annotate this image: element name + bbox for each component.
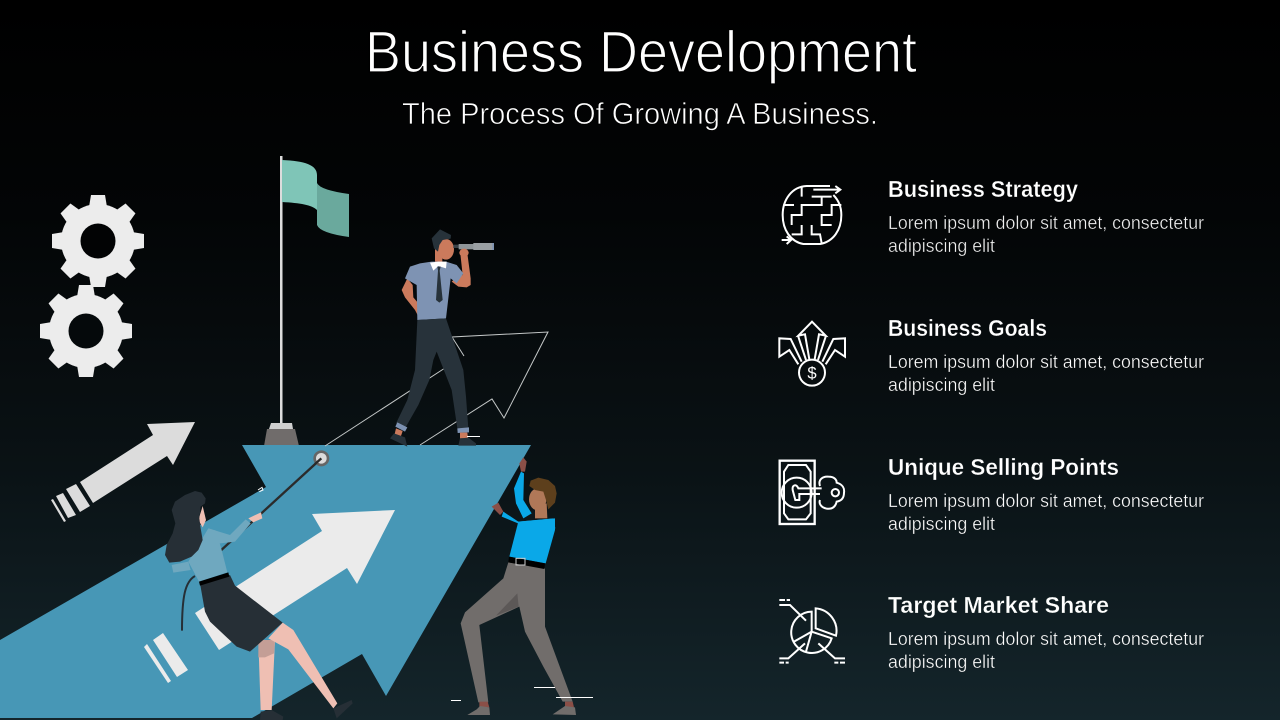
flag base [269,423,293,429]
icon: key and banknote [780,461,844,524]
shoes [467,706,576,715]
item: Target Market Share [888,592,1204,672]
item: Business Strategy [888,176,1204,256]
tie [436,267,443,303]
shirt [405,262,463,320]
trousers [461,562,573,702]
trousers [396,318,468,428]
heading: Target Market Share [888,592,1109,618]
small white mark [258,487,263,492]
body text: adipiscing elit [888,514,995,534]
flag cloth dark part [317,183,349,237]
body text: Lorem ipsum dolor sit amet, consectetur [888,352,1204,372]
raised arm [514,472,532,518]
icon: grey arrow with stripes [51,422,195,522]
short white line [467,436,480,437]
body text: Lorem ipsum dolor sit amet, consectetur [888,213,1204,233]
thin outline arrow [325,332,548,446]
white stripes [144,633,188,683]
front arm [208,519,251,544]
body text [888,491,1204,534]
back leg [258,640,275,710]
trouser shadow [496,593,519,616]
face [529,488,546,510]
belt [508,557,545,569]
hands [492,457,527,515]
white arrow on blue arrow [195,510,395,650]
heading: Unique Selling Points [888,454,1119,480]
collar [430,262,447,271]
figure: man pushing arrow [461,457,576,715]
icon: lower gear [40,285,132,377]
shirt [509,518,555,563]
torso [188,528,227,582]
flag pole [280,156,282,424]
icon: upper gear [52,195,144,287]
heading: Business Strategy [888,176,1078,202]
figure: woman pulling rope [165,452,353,720]
cuffs [395,422,469,433]
face [438,239,454,260]
icon: arrows and dollar coin: $ [807,364,817,383]
subtitle: The Process Of Growing A Business. [402,96,878,131]
heading: Business Goals [888,315,1047,341]
ring [315,452,328,465]
figure: man with telescope [390,229,494,447]
shoes [390,433,476,447]
hair [432,229,451,252]
icon: arrows and dollar coin [779,322,845,386]
item: Business Goals [888,315,1204,395]
hand [248,512,262,522]
flag [264,156,349,446]
rope [182,576,195,631]
flag cloth light part [282,160,317,210]
back arm [172,562,191,573]
telescope [453,243,494,250]
body text: adipiscing elit [888,652,995,672]
body text [888,629,1204,672]
ground lines [451,687,593,701]
ankles [395,428,468,438]
big blue arrow [0,445,531,718]
body text: Lorem ipsum dolor sit amet, consectetur [888,629,1204,649]
skirt [200,575,283,652]
body text: adipiscing elit [888,375,995,395]
hair [165,491,206,563]
body text [888,352,1204,395]
shoes [260,700,353,720]
icon: pie chart with callouts [779,600,845,663]
pole [221,458,321,551]
neck [535,503,547,518]
icon: maze [782,186,841,244]
title: Business Development [365,20,917,85]
belt [199,572,229,586]
ankles [479,702,574,707]
neck [435,247,442,263]
item: Unique Selling Points [888,454,1204,534]
face [198,506,206,527]
body text: Lorem ipsum dolor sit amet, consectetur [888,491,1204,511]
buckle [516,558,525,565]
front leg [268,623,337,708]
body text [888,213,1204,256]
lower arm [502,512,555,531]
hand [459,249,469,257]
hair [529,478,557,509]
left arm [402,278,426,318]
body text: adipiscing elit [888,236,995,256]
right arm [452,251,471,287]
